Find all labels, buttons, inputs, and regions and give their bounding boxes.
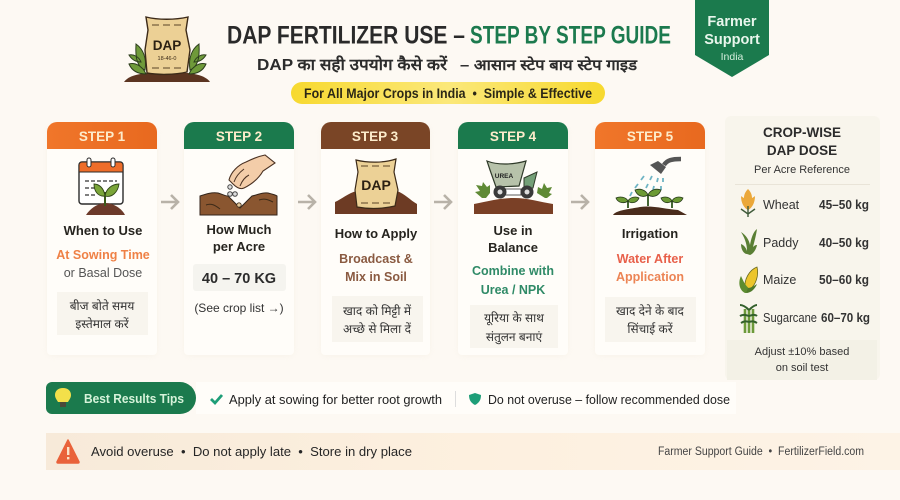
panel subheading: Per Acre Reference [754, 164, 850, 176]
title [227, 22, 671, 50]
step 4 header [458, 122, 568, 149]
step 5 timing: Water After [617, 252, 683, 266]
row: paddy: 40–50 kg [819, 236, 869, 250]
badge: Farmer Support India: Farmer [707, 14, 757, 30]
row: wheat: 45–50 kg [819, 198, 869, 212]
step 4 combination [472, 264, 554, 297]
step 1 heading: When to Use [64, 223, 142, 238]
step 5 hindi note [605, 297, 696, 342]
step 3 hindi note [332, 296, 423, 342]
step 4 heading: Use in [493, 223, 533, 238]
step 3 hindi note: खाद को मिट्टी में [343, 304, 412, 318]
row: sugarcane: Sugarcane [763, 311, 817, 325]
step 1 header [47, 122, 157, 149]
icon: watering spout over seedlings [613, 159, 687, 215]
step 4 hindi note [470, 305, 558, 348]
icon: DAP fertilizer bag with leaves: DAP [153, 38, 181, 53]
step 3 hindi note: अच्छे से मिला दें [343, 322, 412, 336]
panel heading [763, 125, 841, 158]
audience pill: For All Major Crops in India • Simple & Effective [304, 85, 592, 101]
icon: light bulb [55, 388, 71, 407]
step 2 note: (See crop list →) [194, 301, 284, 315]
step 1 hindi note: इस्तेमाल करें [75, 317, 130, 331]
tip 1: Apply at sowing for better root growth [229, 392, 442, 407]
step 5 header: STEP 5 [627, 129, 674, 144]
step 1 hindi note: बीज बोते समय [70, 299, 135, 313]
step 2 heading: How Much [206, 222, 272, 237]
icon: urea spreader cart on soil: UREA [495, 173, 514, 180]
step 1 timing [56, 248, 150, 280]
step 1 header: STEP 1 [79, 129, 126, 144]
row: wheat: Wheat [763, 198, 800, 212]
step 5 header [595, 122, 705, 149]
step 2 header [184, 122, 294, 149]
badge: Farmer Support India [695, 0, 769, 77]
row: maize: Maize [763, 273, 796, 287]
icon: DAP fertilizer bag with leaves: 18-46-0 [158, 56, 176, 62]
icon: warning triangle [57, 440, 79, 463]
row: sugarcane [740, 305, 870, 333]
panel: step 4 [458, 122, 568, 356]
badge: Farmer Support India: Support [704, 32, 760, 48]
arrow 4 [571, 195, 588, 209]
step 3 method: Broadcast & [339, 252, 413, 266]
step 3 heading: How to Apply [335, 226, 418, 241]
step 5 heading: Irrigation [622, 226, 678, 241]
step 2 quantity: 40 – 70 KG [202, 271, 276, 287]
tip 2: Do not overuse – follow recommended dose [488, 392, 730, 407]
title: DAP FERTILIZER USE – [227, 22, 465, 50]
arrow 1 [161, 195, 178, 209]
step 5 hindi note: सिंचाई करें [627, 322, 674, 336]
step 3 header: STEP 3 [352, 129, 399, 144]
icon: DAP bag on soil: DAP [361, 177, 391, 193]
step 4 combination: Combine with [472, 264, 554, 278]
row: sugarcane: 60–70 kg [821, 311, 870, 325]
soil test note: on soil test [776, 362, 828, 374]
source credit: Farmer Support Guide • FertilizerField.com [658, 446, 864, 458]
hindi subtitle: – आसान स्टेप बाय स्टेप गाइड [460, 56, 638, 74]
panel: step 5 [595, 122, 705, 356]
hindi subtitle: DAP का सही उपयोग कैसे करें [257, 55, 449, 74]
step 3 method [339, 252, 413, 284]
badge: Farmer Support India: India [721, 51, 744, 63]
step 1 hindi note [57, 292, 148, 335]
icon: hand dropping seeds on soil [200, 155, 277, 215]
warning text: Avoid overuse • Do not apply late • Store in dry place [91, 444, 412, 459]
step 3 method: Mix in Soil [345, 270, 407, 284]
row: paddy [741, 229, 869, 255]
step 5 timing [616, 252, 684, 284]
step 2 heading: per Acre [213, 239, 265, 254]
step 3 header [321, 122, 430, 149]
icon: urea spreader cart on soil [474, 161, 553, 214]
icon: DAP fertilizer bag with leaves [124, 17, 210, 82]
audience pill [291, 82, 605, 104]
arrow 3 [434, 195, 451, 209]
step 2 header: STEP 2 [216, 129, 262, 144]
panel heading: DAP DOSE [767, 143, 837, 158]
step 5 hindi note: खाद देने के बाद [616, 304, 685, 318]
step 1 timing: or Basal Dose [64, 266, 142, 280]
panel: step 3 [321, 122, 430, 356]
panel heading: CROP-WISE [763, 125, 841, 140]
title: STEP BY STEP GUIDE [470, 22, 671, 50]
step 4 combination: Urea / NPK [481, 283, 545, 297]
step 5 timing: Application [616, 270, 684, 284]
soil test note [727, 340, 877, 380]
step 4 heading: Balance [488, 240, 538, 255]
row: wheat [741, 189, 869, 217]
step 4 heading [488, 223, 538, 255]
step 4 hindi note: संतुलन बनाएं [486, 330, 543, 345]
row: maize [739, 267, 869, 293]
panel: crop-wise DAP dose [725, 116, 880, 380]
soil test note: Adjust ±10% based [755, 346, 849, 358]
step 4 hindi note: यूरिया के साथ [484, 311, 544, 326]
icon: calendar with seedling [79, 158, 125, 215]
row: paddy: Paddy [763, 236, 799, 250]
panel: step 2 [184, 122, 294, 356]
step 4 header: STEP 4 [490, 129, 537, 144]
warning bar [46, 433, 900, 470]
step 2 quantity [193, 264, 286, 291]
row: maize: 50–60 kg [819, 273, 869, 287]
best results tips pill: Best Results Tips [84, 391, 184, 406]
step 1 timing: At Sowing Time [56, 248, 150, 262]
tips strip [46, 382, 736, 414]
best results tips pill [46, 382, 196, 414]
panel: step 1 [47, 122, 157, 356]
hindi subtitle [257, 55, 638, 74]
icon: DAP bag on soil [335, 159, 417, 214]
arrow 2 [298, 195, 315, 209]
step 2 heading [206, 222, 272, 254]
